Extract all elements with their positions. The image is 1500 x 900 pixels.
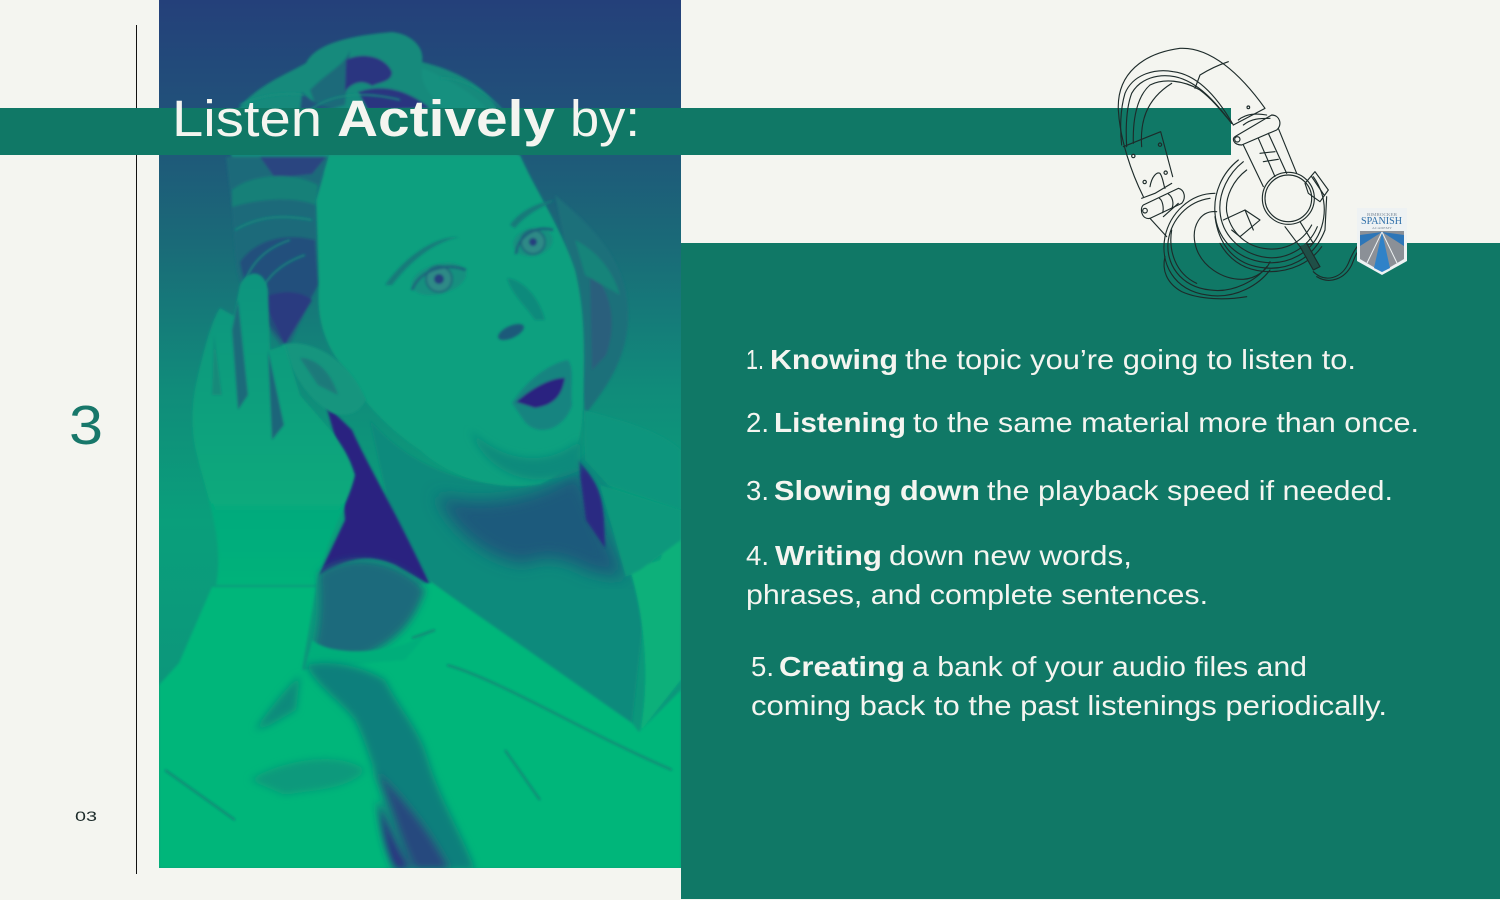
list item 1: Knowing <box>770 344 898 375</box>
page number: 03 <box>75 808 97 824</box>
logo: Spanish academy shield <box>1357 208 1407 275</box>
right eye <box>514 226 554 257</box>
list item 4: down new words, <box>889 540 1132 571</box>
face <box>316 155 584 486</box>
title <box>172 90 640 147</box>
neck <box>375 433 642 722</box>
jacket <box>159 485 681 868</box>
mouth <box>512 360 572 430</box>
title: Listen <box>172 90 322 147</box>
jacket seams <box>165 630 672 820</box>
list item 2 <box>746 407 1419 438</box>
collar shadow <box>312 560 425 657</box>
list item 1: the topic you’re going to listen to. <box>905 344 1356 375</box>
ear pad <box>1164 193 1270 296</box>
logo: Spanish academy shield: RIMROCKER <box>1367 212 1397 217</box>
section number: 3 <box>69 394 103 456</box>
list item 5 <box>751 651 1387 721</box>
hair side <box>226 157 330 345</box>
plug and cable <box>1300 243 1320 270</box>
list item 5: a bank of your audio files and <box>912 651 1307 682</box>
dark hair behind hand <box>319 405 430 585</box>
shoulder right <box>584 410 604 480</box>
neck shadow <box>436 470 625 578</box>
shield rays <box>1360 231 1404 272</box>
hub <box>1262 172 1314 224</box>
list item 2: 2. <box>746 407 769 438</box>
list item 5: Creating <box>779 651 905 682</box>
icon: headphones line drawing <box>1118 48 1362 299</box>
photo: woman listening, duotone <box>159 0 681 870</box>
collar rim <box>306 640 380 667</box>
list item 3: the playback speed if needed. <box>987 475 1393 506</box>
brow and eye details <box>385 200 555 343</box>
ear cup rings <box>1215 160 1324 263</box>
list item 1: 1. <box>746 344 764 375</box>
list item 3 <box>746 475 1393 506</box>
list item 2: Listening <box>774 407 906 438</box>
spokes <box>1223 210 1260 237</box>
top yoke <box>1233 115 1280 145</box>
left eye <box>410 263 468 295</box>
list item 2: to the same material more than once. <box>913 407 1419 438</box>
title: Actively <box>337 90 556 147</box>
chest folds <box>250 663 475 870</box>
title band <box>0 108 1231 155</box>
hair top and bun <box>230 30 518 158</box>
hair strands <box>235 84 503 284</box>
vertical rule <box>136 25 137 874</box>
hand <box>192 274 355 585</box>
left yoke <box>1141 188 1184 218</box>
list item 4: 4. <box>746 540 769 571</box>
ear <box>282 343 366 415</box>
list item 4 <box>746 540 1208 610</box>
content panel <box>681 243 1500 899</box>
list item 5: coming back to the past listenings periodically. <box>751 690 1387 721</box>
list item 5: 5. <box>751 651 774 682</box>
list item 3: Slowing down <box>774 475 980 506</box>
arm rails <box>1243 128 1297 187</box>
dark gap under chin right <box>578 460 605 548</box>
hair right curl <box>555 195 628 415</box>
list item 3: 3. <box>746 475 769 506</box>
logo: Spanish academy shield: SPANISH <box>1361 216 1402 227</box>
title: by: <box>570 90 640 147</box>
list item 4: phrases, and complete sentences. <box>746 579 1208 610</box>
logo: Spanish academy shield: ACADEMY <box>1372 226 1393 230</box>
list item 4: Writing <box>775 540 882 571</box>
list item 1 <box>746 344 1356 375</box>
